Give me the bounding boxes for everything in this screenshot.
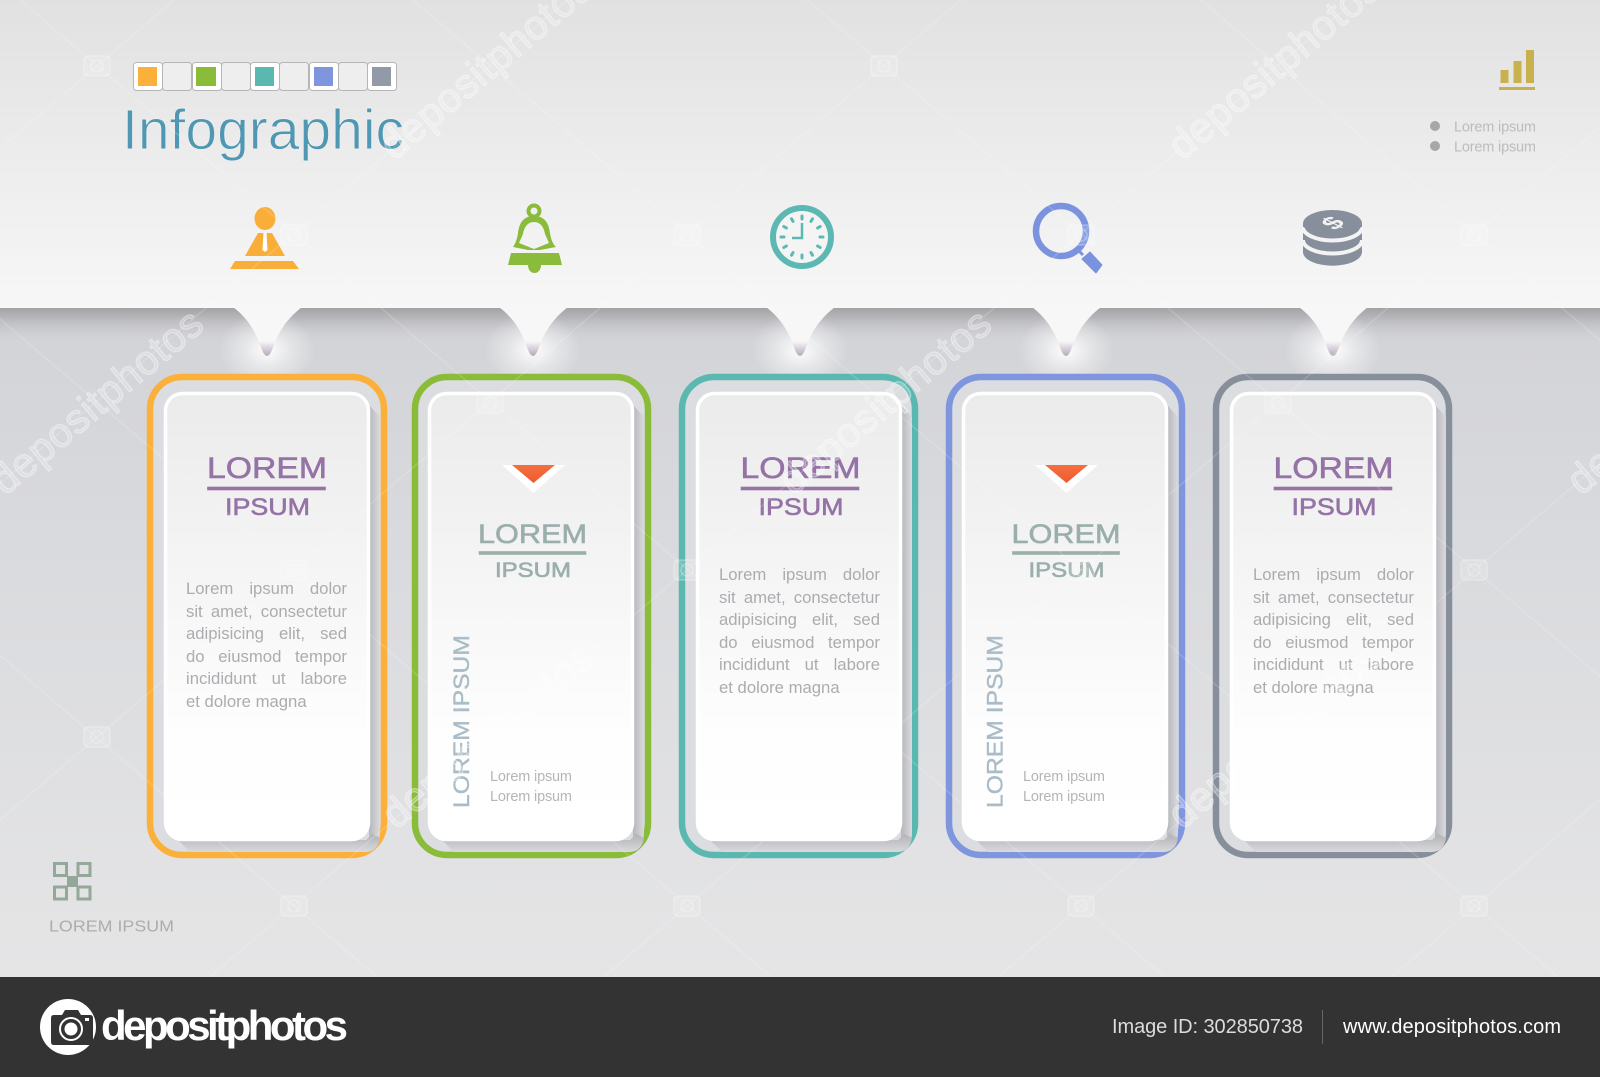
card 1 body text: sit amet, consectetur bbox=[186, 602, 347, 620]
card 1 body text: adipisicing elit, sed bbox=[186, 624, 347, 643]
card 5 body text bbox=[1253, 564, 1414, 704]
card 1 inner sheet bbox=[166, 394, 368, 840]
card 3 body text bbox=[719, 564, 880, 704]
card 5 body text: incididunt ut labore bbox=[1253, 655, 1414, 674]
icon: coins bbox=[1303, 210, 1362, 266]
panel: card 4 bbox=[949, 377, 1182, 855]
card 5 body text: Lorem ipsum dolor bbox=[1253, 565, 1414, 584]
card 3 inner shadow bbox=[710, 405, 912, 852]
card 1 frame bbox=[150, 377, 384, 855]
panel: card 1 bbox=[150, 377, 384, 855]
card 1 heading: LOREM bbox=[207, 452, 327, 485]
footer logo icon bbox=[40, 999, 96, 1055]
card 1 inner shadow bbox=[178, 405, 380, 852]
lower background bbox=[0, 308, 1600, 977]
card 5 heading bbox=[1274, 452, 1394, 521]
card 3 body text: et dolore magna bbox=[719, 678, 840, 696]
footer bar bbox=[0, 977, 1600, 1077]
watermark text: depositphotos bbox=[770, 300, 1000, 503]
watermark text: depositphotos bbox=[1159, 634, 1389, 837]
legend: Lorem ipsum bbox=[1454, 140, 1536, 156]
legend bbox=[1430, 120, 1536, 156]
colour swatch strip bbox=[134, 62, 396, 90]
card 5 body text: do eiusmod tempor bbox=[1253, 632, 1414, 652]
card 1 body text: Lorem ipsum dolor bbox=[186, 579, 347, 598]
card 5 body text: adipisicing elit, sed bbox=[1253, 610, 1414, 629]
watermark text: depositphotos bbox=[373, 634, 603, 837]
panel: card 5 bbox=[1216, 377, 1449, 855]
icon: bell bbox=[508, 206, 562, 273]
icon: magnifier bbox=[1036, 206, 1102, 273]
icon: coins: $ bbox=[1315, 212, 1352, 234]
icon: grid logo bbox=[54, 864, 90, 899]
card 3 heading bbox=[740, 452, 860, 521]
card 5 inner shadow bbox=[1244, 405, 1446, 852]
card 3 inner sheet bbox=[698, 394, 900, 840]
card 5 heading: LOREM bbox=[1274, 452, 1394, 485]
card 3 body text: Lorem ipsum dolor bbox=[719, 565, 880, 584]
card 3 body text: adipisicing elit, sed bbox=[719, 610, 880, 629]
icon: bar chart bbox=[1499, 50, 1535, 90]
tip glows bbox=[219, 312, 1381, 388]
card 2 inner shadow bbox=[442, 405, 644, 852]
card 1 heading bbox=[207, 452, 327, 521]
legend: Lorem ipsum bbox=[1454, 120, 1536, 136]
panel pointers bbox=[233, 307, 1368, 356]
card 5 body text: sit amet, consectetur bbox=[1253, 588, 1414, 606]
card 2 small text bbox=[490, 769, 572, 805]
card 1 body text bbox=[186, 578, 347, 718]
card 4 marker bbox=[1035, 465, 1098, 493]
image id: Image ID: 302850738 bbox=[1112, 1016, 1303, 1038]
top panel bbox=[0, 0, 1600, 308]
card 1 body text: et dolore magna bbox=[186, 692, 307, 710]
card 4 small text: Lorem ipsum bbox=[1023, 789, 1105, 805]
panel: card 2 bbox=[415, 377, 648, 855]
website: www.depositphotos.com bbox=[1342, 1016, 1561, 1038]
card 2 vertical label: LOREM IPSUM bbox=[449, 635, 474, 808]
card 2 heading bbox=[478, 519, 587, 582]
card 5 frame bbox=[1216, 377, 1449, 855]
card 3 body text: incididunt ut labore bbox=[719, 655, 880, 674]
card 5 inner sheet bbox=[1232, 394, 1434, 840]
card 3 heading: IPSUM bbox=[758, 494, 844, 521]
watermark text bbox=[0, 0, 1600, 837]
title: Infographic bbox=[122, 98, 404, 162]
card 4 inner shadow bbox=[976, 405, 1178, 852]
card 2 frame bbox=[415, 377, 648, 855]
card 4 heading: LOREM bbox=[1012, 519, 1120, 549]
card 3 body text: sit amet, consectetur bbox=[719, 588, 880, 606]
card 5 heading: IPSUM bbox=[1292, 494, 1376, 521]
card 2 heading: LOREM bbox=[478, 519, 587, 549]
card 3 frame bbox=[682, 377, 915, 855]
card 2 small text: Lorem ipsum bbox=[490, 789, 572, 805]
card 2 marker bbox=[502, 465, 565, 493]
card 3 body text: do eiusmod tempor bbox=[719, 632, 880, 652]
card 4 frame bbox=[949, 377, 1182, 855]
card 4 heading bbox=[1012, 519, 1120, 582]
panel: card 3 bbox=[682, 377, 915, 855]
card 5 body text: et dolore magna bbox=[1253, 678, 1374, 696]
card 1 body text: incididunt ut labore bbox=[186, 669, 347, 688]
card 3 heading: LOREM bbox=[740, 452, 860, 485]
card 2 small text: Lorem ipsum bbox=[490, 769, 572, 785]
card 2 inner sheet bbox=[430, 394, 632, 840]
card 4 vertical label: LOREM IPSUM bbox=[982, 635, 1008, 808]
icon: person bbox=[230, 207, 299, 269]
footer logo wordmark: depositphotos bbox=[101, 1002, 348, 1049]
card 2 heading: IPSUM bbox=[495, 559, 571, 582]
card 4 small text: Lorem ipsum bbox=[1023, 769, 1105, 785]
card 1 heading: IPSUM bbox=[225, 494, 310, 521]
icon: clock bbox=[773, 208, 831, 266]
card 1 body text: do eiusmod tempor bbox=[186, 646, 347, 666]
footer divider bbox=[1322, 1010, 1323, 1044]
bottom left label: LOREM IPSUM bbox=[49, 918, 174, 936]
watermark cameras bbox=[84, 56, 1487, 916]
card 4 inner sheet bbox=[964, 394, 1166, 840]
card 4 heading: IPSUM bbox=[1028, 559, 1104, 582]
card 4 small text bbox=[1023, 769, 1105, 805]
panel shadow band bbox=[0, 308, 1600, 344]
